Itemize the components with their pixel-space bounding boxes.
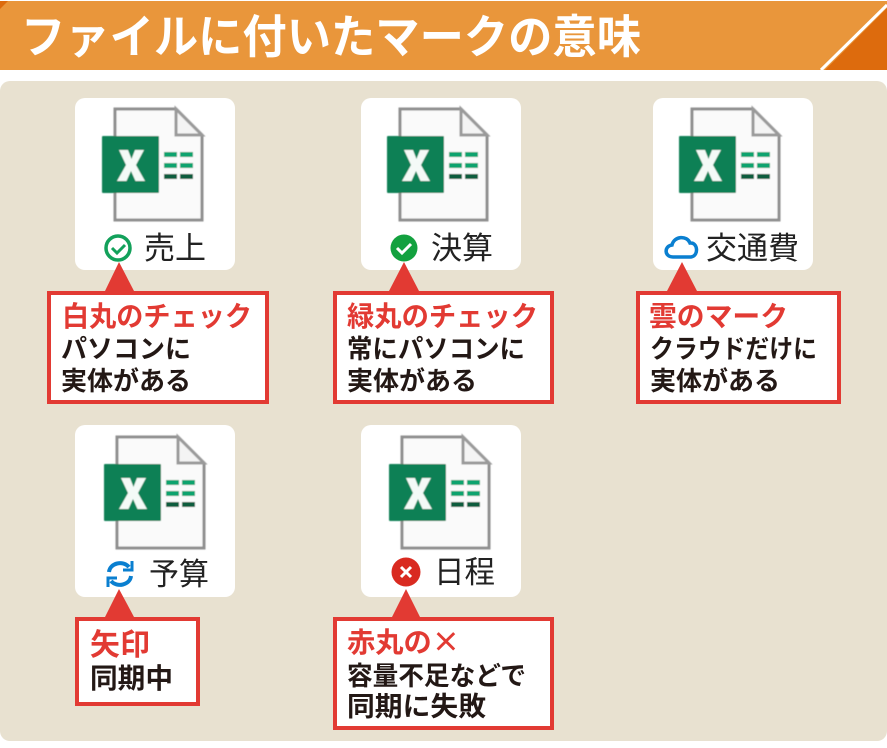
file name: 売上 [144, 223, 206, 268]
arrow [392, 589, 420, 617]
file card: 売上 [75, 98, 235, 270]
file card: 決算 [361, 98, 521, 270]
icon: sync arrows [108, 561, 132, 587]
panel: arrows [75, 425, 235, 704]
file card: 予算 [75, 425, 235, 597]
callout: 同期に失敗 [347, 692, 486, 722]
arrow [667, 262, 697, 291]
panel: white circle check [49, 98, 267, 402]
callout: 緑丸のチェック [347, 301, 538, 332]
file name: 決算 [431, 223, 493, 268]
callout: 実体がある [347, 366, 477, 396]
panel: cloud mark [638, 98, 839, 402]
title banner [0, 1, 887, 70]
file card: 交通費 [653, 98, 813, 270]
arrow [105, 262, 134, 291]
arrow [389, 262, 419, 291]
title: ファイルに付いたマークの意味 [21, 11, 641, 63]
callout [335, 619, 552, 728]
panel: red circle x [335, 425, 552, 728]
callout [49, 293, 267, 402]
callout: 雲のマーク [649, 301, 788, 332]
callout: 赤丸の× [347, 621, 460, 661]
arrow [105, 589, 134, 617]
callout: 実体がある [61, 366, 191, 396]
file name: 日程 [434, 547, 495, 592]
callout: 実体がある [650, 366, 780, 396]
callout: 同期中 [90, 663, 173, 694]
icon: cloud [666, 238, 697, 257]
file card: 日程 [361, 425, 521, 597]
callout: 容量不足などで [347, 661, 526, 691]
file name: 予算 [149, 549, 209, 594]
icon: green circle check [390, 234, 418, 262]
icon: white circle check [106, 236, 130, 260]
callout: 常にパソコンに [347, 334, 525, 364]
callout [638, 293, 839, 402]
callout: パソコンに [61, 334, 191, 364]
panel: green circle check [335, 98, 552, 402]
callout [77, 619, 198, 704]
callout: クラウドだけに [650, 334, 817, 364]
file name: 交通費 [706, 223, 799, 268]
icon: red circle x [392, 558, 420, 586]
callout: 矢印 [90, 629, 150, 662]
callout: 白丸のチェック [62, 301, 252, 332]
callout [335, 293, 552, 402]
